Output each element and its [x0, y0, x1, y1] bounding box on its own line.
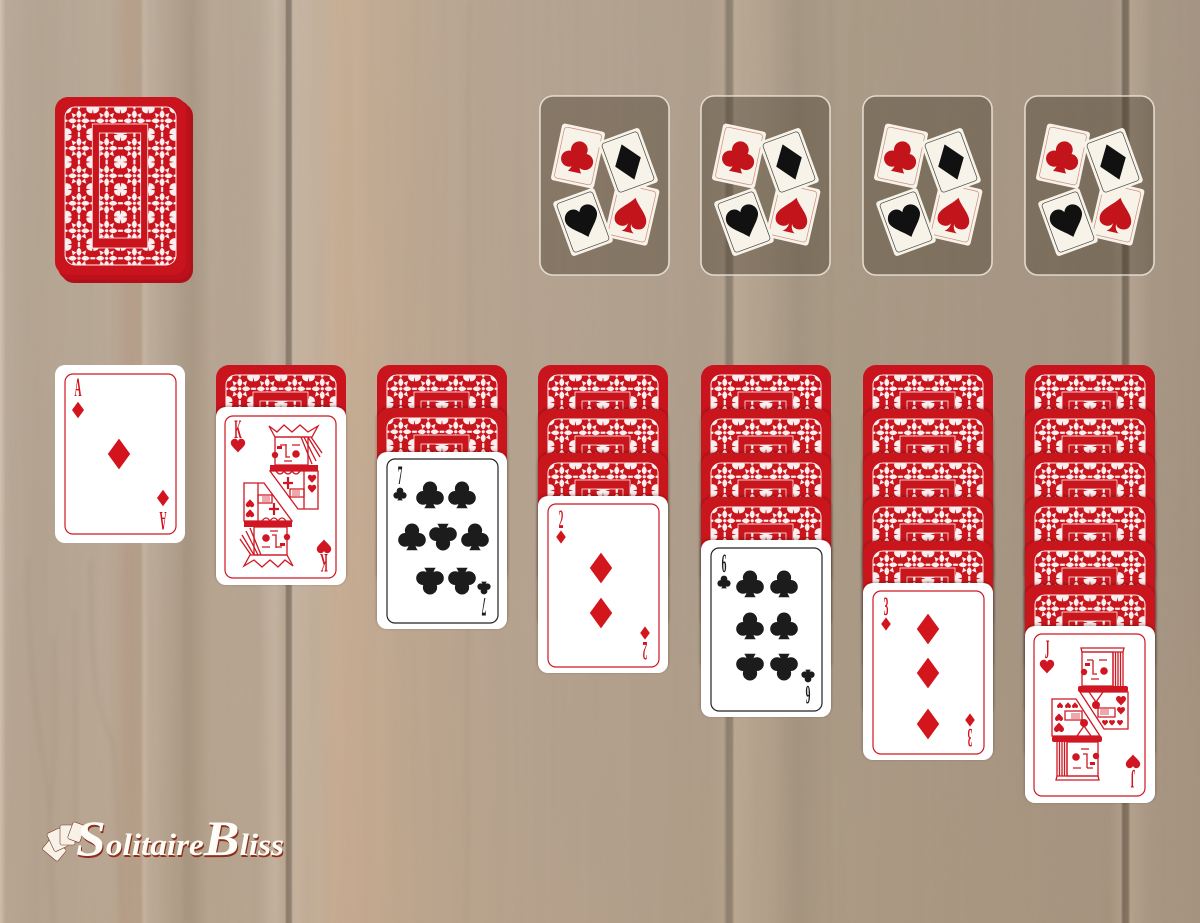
foundation slot 2 — [701, 96, 830, 275]
column 1: ace of diamonds: A — [75, 373, 82, 403]
column 2: face-down card and king of hearts: K — [320, 547, 328, 577]
logo: Solitaire Bliss: SolitaireBliss — [76, 810, 284, 866]
column 7: face-down cards and jack of hearts — [1025, 365, 1155, 803]
foundation slot 1 — [540, 96, 669, 275]
column 5: face-down cards and six of clubs — [701, 365, 831, 717]
column 3: face-down cards and seven of clubs: 7 — [398, 461, 402, 491]
column 7: face-down cards and jack of hearts: J — [1045, 635, 1049, 665]
column 2: face-down card and king of hearts: K — [234, 415, 242, 445]
column 4: face-down cards and two of diamonds: 2 — [643, 635, 647, 665]
column 2: face-down card and king of hearts — [216, 365, 346, 585]
column 1: ace of diamonds — [55, 365, 185, 543]
stock pile — [55, 97, 193, 283]
column 3: face-down cards and seven of clubs — [377, 365, 507, 629]
column 3: face-down cards and seven of clubs: 7 — [482, 591, 486, 621]
column 6: face-down cards and three of diamonds: 3 — [968, 722, 972, 752]
foundation slot 4 — [1025, 96, 1154, 275]
column 4: face-down cards and two of diamonds: 2 — [559, 505, 563, 535]
column 1: ace of diamonds: A — [159, 505, 166, 535]
column 7: face-down cards and jack of hearts: J — [1131, 763, 1135, 793]
column 6: face-down cards and three of diamonds: 3 — [884, 592, 888, 622]
icon: card fan — [42, 821, 86, 862]
column 5: face-down cards and six of clubs: 6 — [722, 549, 726, 579]
column 6: face-down cards and three of diamonds — [863, 365, 993, 760]
column 4: face-down cards and two of diamonds — [538, 365, 668, 673]
foundation slot 3 — [863, 96, 992, 275]
column 5: face-down cards and six of clubs: 6 — [806, 679, 810, 709]
